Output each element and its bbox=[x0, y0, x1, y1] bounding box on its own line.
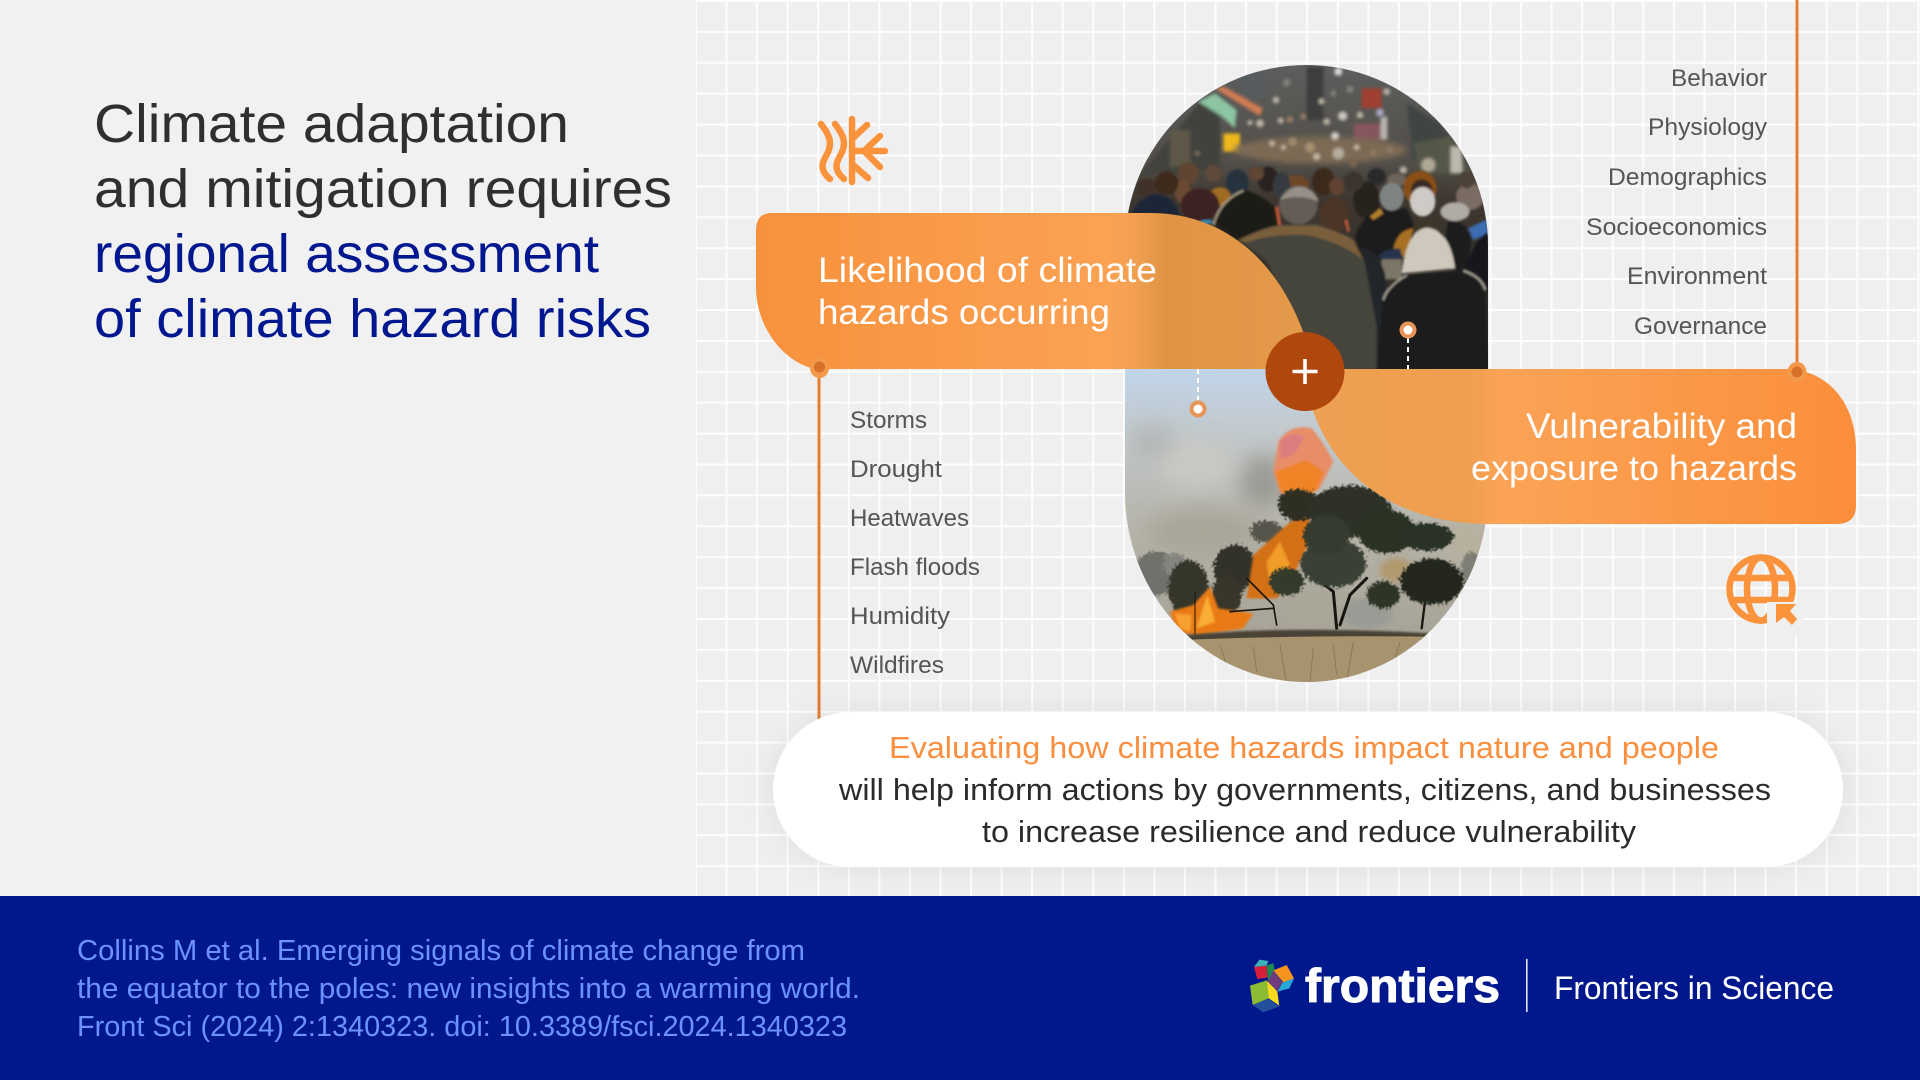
haze beneath canopy bbox=[1283, 592, 1357, 625]
callout text: Evaluating how climate hazards impact nature and people bbox=[889, 730, 1719, 765]
list: hazards: Storms bbox=[850, 407, 927, 434]
icon: globe with cursor bbox=[1730, 558, 1803, 636]
list: hazards bbox=[850, 407, 980, 679]
photo: crowd of people bbox=[1120, 60, 1500, 370]
citation: Front Sci (2024) 2:1340323. doi: 10.3389/fsci.2024.1340323 bbox=[77, 1011, 847, 1043]
callout bbox=[773, 712, 1843, 867]
list: vulnerability factors: Demographics bbox=[1608, 164, 1767, 191]
text: likelihood label: Likelihood of climate bbox=[818, 251, 1157, 290]
title: regional assessment bbox=[94, 224, 599, 284]
callout text bbox=[838, 730, 1771, 849]
photo: wildfire bbox=[1120, 365, 1500, 692]
list: vulnerability factors bbox=[1586, 65, 1767, 340]
list: hazards: Flash floods bbox=[850, 554, 980, 581]
citation: the equator to the poles: new insights into a warming world. bbox=[77, 973, 860, 1005]
title: Climate adaptation bbox=[94, 94, 569, 154]
logo divider bbox=[1526, 959, 1528, 1012]
citation bbox=[77, 935, 860, 1043]
list: vulnerability factors: Physiology bbox=[1648, 114, 1767, 141]
logo icon bbox=[1250, 960, 1294, 1012]
trunks bbox=[1195, 578, 1425, 635]
bokeh highlights bbox=[1194, 68, 1436, 174]
callout text: to increase resilience and reduce vulnerability bbox=[982, 814, 1637, 849]
panel: likelihood of climate hazards bbox=[756, 213, 1306, 369]
orange vertical connector right bbox=[1796, 0, 1798, 372]
list: vulnerability factors: Behavior bbox=[1671, 65, 1767, 92]
list: hazards: Humidity bbox=[850, 603, 950, 630]
text: vulnerability label: exposure to hazards bbox=[1471, 449, 1797, 488]
list: vulnerability factors: Socioeconomics bbox=[1586, 214, 1767, 241]
citation: Collins M et al. Emerging signals of climate change from bbox=[77, 935, 805, 967]
photo marker on crowd bbox=[1402, 324, 1414, 369]
connector dot left bbox=[810, 358, 829, 378]
title: and mitigation requires bbox=[94, 159, 672, 219]
ground bbox=[1178, 630, 1437, 642]
icon: heat and cold bbox=[821, 119, 885, 182]
callout text: will help inform actions by governments, citizens, and businesses bbox=[838, 772, 1771, 807]
title bbox=[94, 94, 672, 349]
logo wordmark: frontiers bbox=[1305, 959, 1500, 1012]
list: vulnerability factors: Governance bbox=[1634, 313, 1767, 340]
list: hazards: Wildfires bbox=[850, 652, 944, 679]
text: likelihood label: hazards occurring bbox=[818, 293, 1110, 332]
crowd figures bbox=[1132, 162, 1489, 370]
panel: vulnerability and exposure bbox=[1300, 369, 1856, 524]
list: hazards: Drought bbox=[850, 456, 942, 483]
photo marker on fire bbox=[1192, 369, 1204, 416]
background trees bbox=[1133, 521, 1482, 617]
journal name: Frontiers in Science bbox=[1554, 970, 1834, 1006]
text: vulnerability label bbox=[1471, 407, 1797, 488]
footer band bbox=[0, 896, 1920, 1080]
title: of climate hazard risks bbox=[94, 289, 651, 349]
list: vulnerability factors: Environment bbox=[1627, 263, 1767, 290]
main canopy bbox=[1269, 486, 1463, 608]
list: hazards: Heatwaves bbox=[850, 505, 969, 532]
plus button bbox=[1266, 332, 1344, 411]
connector dot right bbox=[1788, 362, 1806, 382]
flames bbox=[1170, 427, 1333, 636]
text: likelihood label bbox=[818, 251, 1157, 332]
text: vulnerability label: Vulnerability and bbox=[1526, 407, 1797, 446]
orange vertical connector left bbox=[818, 369, 820, 721]
